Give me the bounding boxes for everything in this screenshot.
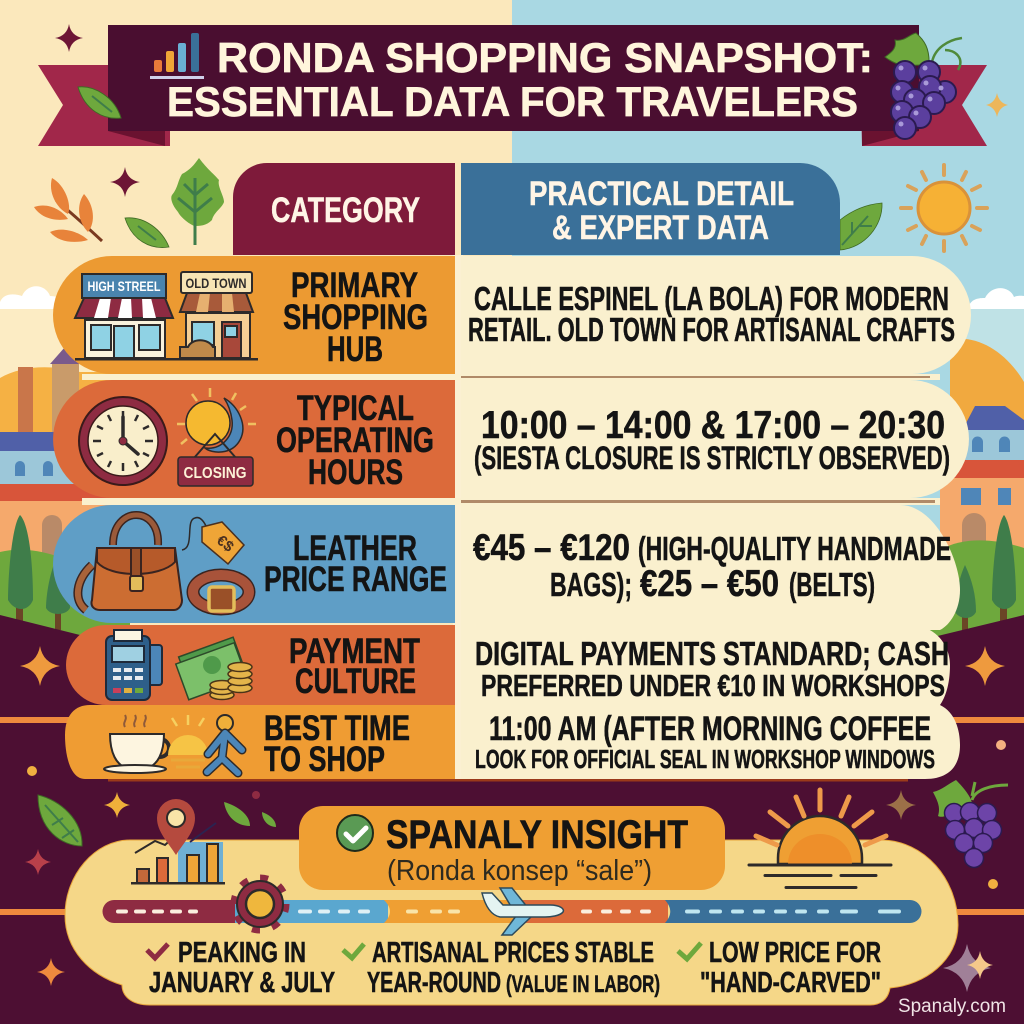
icon: check badge — [337, 815, 373, 851]
label: primary shopping hub: HUB — [327, 330, 383, 369]
note: peaking: PEAKING IN — [178, 937, 306, 969]
icon: clock — [79, 397, 167, 485]
icon: lower leaves — [38, 795, 276, 846]
panel: row 4 payment culture — [66, 625, 455, 705]
panel: row 3 detail: (BELTS) — [789, 566, 875, 603]
row gap background — [82, 374, 940, 505]
icon: high street shop — [75, 274, 173, 358]
bottom notes — [147, 937, 881, 999]
icon: autumn branch — [34, 178, 102, 242]
title — [167, 34, 873, 125]
timeline road — [103, 900, 922, 923]
note: artisanal: YEAR-ROUND — [367, 967, 501, 999]
panel: category header — [233, 163, 455, 255]
note: peaking — [147, 937, 335, 999]
detail separators — [461, 376, 935, 503]
panel: row 1 primary shopping hub — [53, 256, 455, 374]
icon: sun top right — [901, 165, 987, 251]
icon: coffee cup — [104, 715, 169, 773]
label: leather price range: PRICE RANGE — [264, 560, 447, 599]
icon: card terminal — [106, 630, 162, 700]
decorative sparkles upper — [55, 24, 1008, 197]
label: payment culture — [289, 632, 420, 701]
panel: detail header — [461, 163, 840, 255]
panel: row 5 best time to shop — [65, 705, 455, 779]
panel: insight heading box — [299, 806, 725, 890]
panel: insight heading box: SPANALY INSIGHT — [386, 813, 688, 857]
icon: belt — [193, 575, 249, 611]
note: artisanal — [343, 937, 660, 999]
decorative sparkles lower — [20, 646, 1006, 992]
label: payment culture: CULTURE — [295, 662, 416, 701]
icon: location chart — [131, 799, 225, 884]
note: low price: "HAND-CARVED" — [700, 967, 881, 999]
panel: row 4 and 5 details — [461, 625, 960, 779]
panel: insight trend base — [65, 840, 958, 1005]
panel: row 3 detail: €45 – €120 — [473, 527, 630, 568]
icon: large green leaf — [171, 158, 224, 245]
label: typical operating hours: OPERATING — [276, 421, 434, 460]
label: typical operating hours — [276, 389, 434, 492]
note: artisanal: (VALUE IN LABOR) — [506, 971, 660, 998]
icon: high street shop: HIGH STREEL — [88, 278, 161, 294]
watermark: Spanaly.com — [898, 996, 1006, 1017]
label: primary shopping hub: SHOPPING — [283, 298, 428, 337]
note: low price: LOW PRICE FOR — [709, 937, 881, 969]
label: typical operating hours: TYPICAL — [297, 389, 414, 428]
note: peaking: JANUARY & JULY — [149, 967, 335, 999]
panel: insight heading box: (Ronda konsep “sale”) — [387, 855, 652, 887]
title: RONDA SHOPPING SNAPSHOT: — [217, 34, 873, 81]
panel: row 3 leather price range — [53, 505, 455, 623]
label: typical operating hours: HOURS — [308, 453, 403, 492]
icon: price tag — [182, 518, 244, 564]
base line — [75, 358, 258, 360]
icon: grapes on banner — [885, 33, 962, 139]
panel: row 1 detail — [461, 256, 971, 374]
banner ribbon — [38, 25, 987, 146]
icon: old town shop: OLD TOWN — [186, 275, 246, 291]
label: leather price range — [264, 529, 447, 599]
panel: detail header: PRACTICAL DETAIL — [529, 175, 794, 213]
icon: old town shop — [180, 272, 253, 358]
icon: price tag: €$ — [213, 532, 237, 556]
icon: sun and moon closing sign — [177, 388, 256, 486]
icon: banner leaf — [78, 87, 121, 118]
label: best time to shop — [264, 709, 410, 779]
label: primary shopping hub: PRIMARY — [291, 266, 418, 305]
icon: rising sun and walker — [168, 715, 242, 773]
panel: row 2 operating hours — [53, 380, 455, 498]
panel: row 3 detail — [461, 505, 960, 630]
icon: leather bag — [78, 515, 182, 610]
bottom band edge — [108, 779, 908, 782]
panel: row 3 detail: €25 – €50 — [640, 563, 779, 604]
icon: cash and coins — [176, 637, 252, 700]
icon: small leaf — [125, 218, 169, 248]
label: payment culture: PAYMENT — [289, 632, 420, 671]
panel: row 2 detail: 10:00 – 14:00 & 17:00 – 20:30 — [481, 404, 945, 447]
panel: row 2 detail — [461, 380, 969, 498]
icon: sun and moon closing sign: CLOSING — [184, 465, 246, 482]
label: best time to shop: TO SHOP — [264, 740, 385, 779]
note: artisanal: ARTISANAL PRICES STABLE — [372, 937, 654, 969]
icon: lower grapes — [933, 780, 1008, 868]
note: low price — [678, 937, 881, 999]
panel: category header: CATEGORY — [271, 191, 420, 230]
icon: sunset — [749, 790, 891, 888]
icon: title bar chart — [150, 33, 204, 79]
panel: row 3 detail: BAGS); — [550, 566, 632, 603]
label: best time to shop: BEST TIME — [264, 709, 410, 748]
icon: plane — [482, 888, 563, 935]
label: primary shopping hub — [283, 266, 428, 369]
icon: header leaf — [840, 203, 882, 250]
table column gap — [453, 255, 463, 780]
icon: gear — [234, 878, 286, 930]
panel: detail header: & EXPERT DATA — [552, 209, 769, 247]
label: leather price range: LEATHER — [293, 529, 417, 568]
title: ESSENTIAL DATA FOR TRAVELERS — [167, 78, 858, 125]
